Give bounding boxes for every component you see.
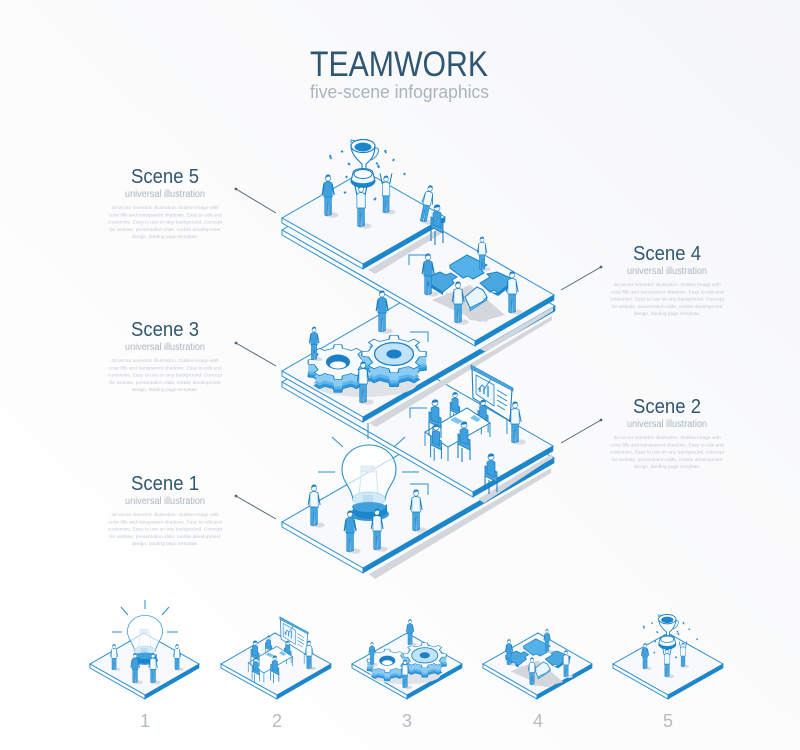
mini scene 1 bbox=[90, 600, 199, 699]
label: Scene 2: customize. Easy to use on any background. Concept bbox=[610, 450, 725, 456]
icon: presentation board bbox=[471, 365, 513, 434]
label: Scene 5: color fills and transparent shadows. Easy to edit and bbox=[108, 212, 222, 218]
connector: Scene 3 bbox=[235, 342, 276, 366]
connector: Scene 4 bbox=[561, 266, 602, 290]
person: puzzle left bbox=[422, 253, 439, 297]
number 3: 3 bbox=[402, 711, 412, 731]
label: Scene 4: customize. Easy to use on any background. Concept bbox=[610, 297, 725, 303]
label: Scene 3 bbox=[108, 319, 223, 393]
label: Scene 2: Scene 2 bbox=[633, 396, 701, 418]
scene 1 platform bbox=[282, 412, 554, 579]
person: gears left bbox=[309, 327, 323, 361]
mini scene 4 bbox=[483, 629, 592, 699]
person: puzzle back bbox=[477, 237, 491, 271]
person: presenter bbox=[509, 401, 526, 445]
label: Scene 1: 3d vector isometric illustration. Outline image with bbox=[111, 512, 219, 518]
number 1: 1 bbox=[140, 711, 150, 731]
label: Scene 2: color fills and transparent shadows. Easy to edit and bbox=[610, 442, 724, 448]
label: Scene 2 bbox=[610, 396, 725, 470]
label: Scene 3: color fills and transparent shadows. Easy to edit and bbox=[108, 365, 222, 371]
person: holding trophy bbox=[354, 183, 372, 229]
person: bulb front right bbox=[371, 508, 388, 552]
label: Scene 1: color fills and transparent shadows. Easy to edit and bbox=[108, 519, 222, 525]
label: Scene 3: customize. Easy to use on any background. Concept bbox=[108, 373, 223, 379]
label: Scene 1: for website, presentation slide, mobile development bbox=[109, 534, 221, 540]
label: Scene 5: customize. Easy to use on any background. Concept bbox=[108, 220, 223, 226]
person: seated on edge bbox=[485, 453, 497, 494]
icon: trophy bbox=[330, 140, 405, 200]
icon: meeting table bbox=[425, 392, 490, 462]
scene 2 platform bbox=[282, 336, 553, 503]
person: cheering right bbox=[380, 173, 396, 214]
label: Scene 1: design, landing page template. bbox=[132, 541, 198, 547]
mini scene 2 bbox=[221, 617, 331, 699]
label: Scene 4: Scene 4 bbox=[633, 243, 701, 265]
person: bulb right bbox=[410, 489, 427, 533]
label: Scene 4: 3d vector isometric illustration. Outline image with bbox=[613, 282, 721, 288]
person: gears top bbox=[376, 290, 393, 334]
mini scene 3 bbox=[352, 619, 462, 699]
number 5: 5 bbox=[663, 711, 673, 731]
title: TEAMWORK bbox=[310, 45, 488, 84]
label: Scene 4: color fills and transparent shadows. Easy to edit and bbox=[610, 289, 724, 295]
scene 4 platform bbox=[282, 184, 554, 352]
label: Scene 5: 3d vector isometric illustration. Outline image with bbox=[111, 205, 219, 211]
label: Scene 4: design, landing page template. bbox=[634, 311, 700, 317]
label: Scene 3: for website, presentation slide, mobile development bbox=[109, 380, 221, 386]
label: Scene 5: design, landing page template. bbox=[132, 234, 198, 240]
scene 3 platform bbox=[282, 260, 555, 427]
number 2: 2 bbox=[272, 711, 282, 731]
person: on chair bbox=[431, 204, 443, 245]
corner brackets bbox=[409, 255, 428, 495]
label: Scene 1 bbox=[108, 473, 223, 547]
person: cheering left bbox=[322, 174, 339, 218]
icon: gears bbox=[308, 335, 426, 397]
mini scene 5 bbox=[613, 614, 723, 699]
label: Scene 2: universal illustration bbox=[627, 419, 707, 430]
icon: puzzle bbox=[425, 255, 515, 322]
connector: Scene 2 bbox=[561, 419, 602, 443]
subtitle: five-scene infographics bbox=[310, 81, 489, 102]
number 4: 4 bbox=[533, 711, 543, 731]
person: gears front bbox=[357, 361, 374, 405]
label: Scene 1: universal illustration bbox=[125, 496, 205, 507]
label: Scene 3: universal illustration bbox=[125, 342, 205, 353]
label: Scene 5: Scene 5 bbox=[131, 166, 199, 188]
connector: Scene 1 bbox=[235, 495, 276, 519]
label: Scene 4: for website, presentation slide, mobile development bbox=[611, 304, 723, 310]
scene 5 platform bbox=[282, 171, 445, 274]
label: Scene 2: for website, presentation slide, mobile development bbox=[611, 457, 723, 463]
label: Scene 5: universal illustration bbox=[125, 189, 205, 200]
label: Scene 1: customize. Easy to use on any background. Concept bbox=[108, 527, 223, 533]
label: Scene 2: design, landing page template. bbox=[634, 464, 700, 470]
label: Scene 3: Scene 3 bbox=[131, 319, 199, 341]
label: Scene 5: for website, presentation slide, mobile development bbox=[109, 227, 221, 233]
person: climbing bbox=[418, 184, 440, 225]
person: bulb left bbox=[308, 484, 325, 528]
person: puzzle right bbox=[506, 271, 523, 315]
label: Scene 5 bbox=[108, 166, 223, 240]
label: Scene 2: 3d vector isometric illustration. Outline image with bbox=[613, 435, 721, 441]
icon: lightbulb bbox=[342, 445, 396, 521]
label: Scene 4: universal illustration bbox=[627, 266, 707, 277]
label: Scene 3: 3d vector isometric illustration. Outline image with bbox=[111, 358, 219, 364]
connector: Scene 5 bbox=[235, 188, 276, 213]
label: Scene 1: Scene 1 bbox=[131, 473, 199, 495]
label: Scene 3: design, landing page template. bbox=[132, 387, 198, 393]
lightbulb rays bbox=[318, 423, 419, 472]
person: bulb front left bbox=[344, 510, 361, 554]
person: puzzle front bbox=[452, 281, 469, 325]
label: Scene 4 bbox=[610, 243, 725, 317]
